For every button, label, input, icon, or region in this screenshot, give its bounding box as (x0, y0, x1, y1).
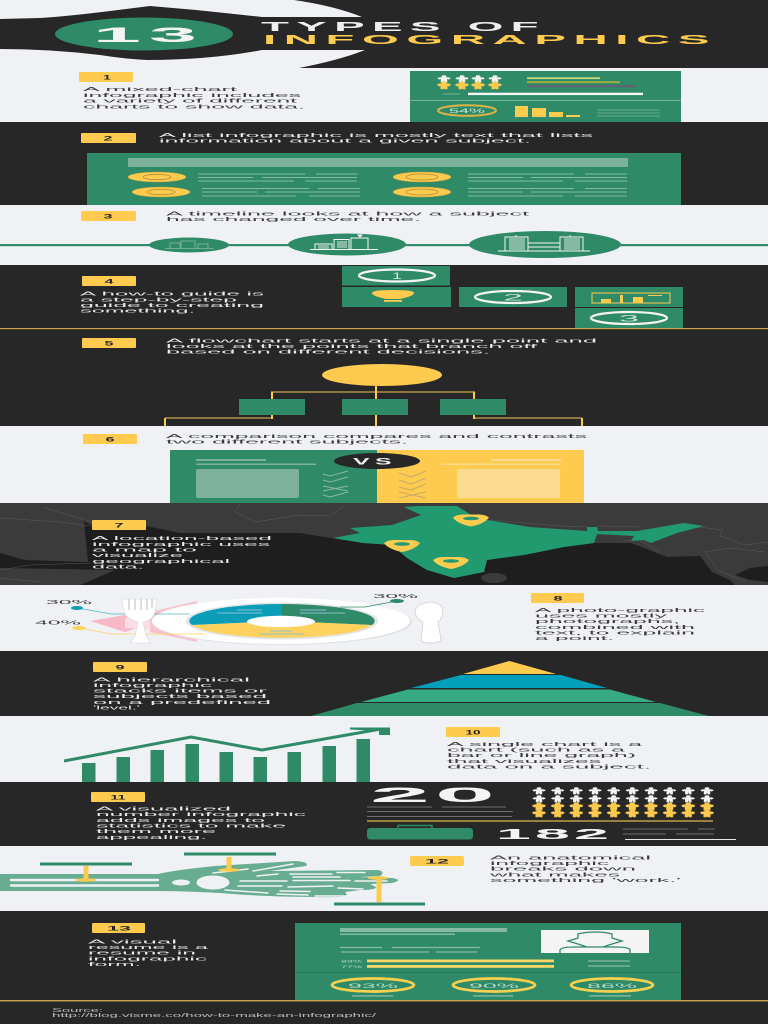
description 11: number infographic (96, 812, 307, 818)
description 8: uses mostly (535, 614, 668, 620)
ring 93 percent (332, 978, 414, 997)
timeline (0, 231, 768, 258)
description 9: subjects based (93, 694, 267, 700)
tag 12: 12 (425, 858, 451, 866)
plate (152, 598, 412, 645)
description 13: resume in (88, 950, 196, 956)
description 8: combined with (535, 625, 695, 631)
mixed chart illustration (410, 71, 681, 122)
description 6: two different subjects. (166, 440, 410, 446)
description 8: A photo-graphic (535, 608, 706, 614)
tag 3 (81, 211, 136, 221)
description 12: what makes (486, 872, 621, 878)
tag 5 (82, 338, 136, 348)
description 9 (93, 678, 271, 712)
panel 4: how-to (0, 265, 768, 329)
description 2: A list infographic is mostly text that lists (159, 133, 594, 139)
bar chart (64, 728, 390, 782)
description 3: has changed over time. (166, 217, 423, 223)
callout pin right (334, 876, 425, 906)
fork (122, 599, 157, 643)
description 1: a variety of different (83, 98, 299, 104)
tag 6: 6 (106, 436, 116, 444)
panel 7: location map (0, 503, 768, 585)
title (261, 20, 717, 47)
ring 86 percent (571, 978, 653, 997)
step 2 block: 2 (503, 292, 523, 304)
panel 11: visualized number (0, 782, 768, 846)
step 1 block (342, 266, 450, 286)
description 12: something 'work.' (490, 878, 681, 884)
description 7: A location-based (92, 536, 272, 542)
description 4 (80, 292, 265, 314)
skill bars (341, 958, 554, 969)
description 11: A visualized (96, 806, 231, 812)
tag 12 (410, 856, 464, 866)
trend arrow (64, 728, 390, 761)
panel 12: anatomical (0, 846, 768, 911)
description 3: A timeline looks at how a subject (166, 212, 531, 218)
tag 6 (83, 434, 137, 444)
big number 20 (367, 784, 513, 816)
borders (0, 504, 768, 582)
panel 2: list (0, 122, 768, 205)
tag 8 (531, 593, 584, 603)
description 11: them more (96, 829, 216, 835)
map pin north (453, 514, 489, 526)
tag 13 (92, 923, 145, 933)
description 7 (92, 536, 272, 570)
percentage labels: 30% (373, 594, 418, 600)
timeline icon medium (310, 235, 378, 250)
description 6 (166, 434, 588, 446)
description 13: A visual (88, 940, 177, 946)
panel 1: mixed chart (0, 68, 768, 122)
description 5 (166, 338, 597, 356)
description 13: form. (88, 962, 143, 968)
description 8: photographs, (535, 619, 682, 625)
panel 10: single chart (0, 716, 768, 782)
description 1: A mixed-chart (83, 87, 239, 93)
flowchart (165, 364, 582, 426)
description 10: data on a subject. (447, 764, 653, 770)
description 13 (88, 940, 211, 968)
description 7: data. (92, 564, 146, 570)
portrait (541, 930, 649, 953)
description 8 (535, 608, 706, 642)
tag 7 (92, 520, 146, 530)
description 12 (486, 856, 681, 884)
list illustration (87, 153, 681, 205)
briefcase icon (367, 826, 473, 840)
description 10 (447, 742, 653, 770)
ring 93 percent: 93% (348, 983, 399, 990)
panel 5: flowchart (0, 329, 768, 426)
Sri Lanka (481, 573, 507, 583)
chart block (575, 287, 683, 307)
ring 90 percent (453, 978, 535, 997)
donut chart (189, 604, 375, 638)
description 9: stacks items or (93, 688, 267, 694)
map pin west (384, 540, 420, 552)
tag 7: 7 (114, 522, 125, 530)
description 6: A comparison compares and contrasts (166, 434, 588, 440)
tag 9: 9 (116, 664, 126, 672)
description 7: visualize (92, 553, 183, 559)
people grid (532, 787, 714, 817)
skill bars: 89% (341, 958, 363, 964)
title: INFOGRAPHICS (263, 33, 717, 47)
tag 1 (79, 72, 133, 82)
description 4: A how-to guide is (80, 292, 265, 298)
description 12: An anatomical (490, 856, 651, 862)
sea (0, 521, 735, 585)
description 13: infographic (88, 956, 208, 962)
description 9: on a predefined (93, 700, 271, 706)
panel 9: hierarchical (0, 651, 768, 716)
mixed chart illustration: 54% (449, 109, 487, 115)
description 2: information about a given subject. (159, 138, 533, 144)
tag 2 (81, 133, 136, 143)
description 11 (96, 806, 307, 841)
tag 9 (93, 662, 147, 672)
description 11: appealing. (96, 835, 209, 841)
panel 6: comparison (0, 426, 768, 503)
description 7: infographic uses (92, 542, 271, 548)
description 1: infographic includes (83, 93, 302, 99)
description 13: resume is a (88, 945, 211, 951)
leader lines (77, 601, 397, 634)
description 7: a map to (92, 548, 197, 554)
ring 86 percent: 86% (587, 983, 638, 990)
percentage labels (35, 594, 418, 630)
step 3 block (575, 308, 683, 328)
description 5: based on different decisions. (166, 350, 492, 356)
title: TYPES OF (261, 20, 546, 34)
step 2 block (459, 287, 567, 307)
timeline icon large (498, 235, 590, 251)
tag 4 (82, 276, 136, 286)
description 10: bar or line graph) (447, 753, 636, 759)
VS badge: VS (353, 456, 397, 466)
tag 10 (446, 727, 500, 737)
description 9: 'level.' (93, 706, 140, 712)
skill bars: 77% (341, 964, 363, 969)
description 7: geographical (92, 559, 230, 565)
callout pin left (40, 862, 132, 882)
tag 8: 8 (554, 596, 564, 602)
pink napkin (90, 601, 197, 642)
panel 13: visual resume (0, 911, 768, 1001)
bulb block (342, 287, 451, 307)
description 5: A flowchart starts at a single point and (166, 338, 597, 344)
source footer: Source: (52, 1008, 103, 1014)
tag 13: 13 (107, 926, 133, 932)
tag 1: 1 (103, 74, 112, 82)
description 4: guide to creating (80, 303, 264, 309)
pyramid (311, 661, 709, 716)
description 12: breaks down (490, 866, 636, 872)
resume illustration (295, 923, 681, 1000)
tag 11 (91, 792, 145, 802)
map pin south (433, 557, 469, 569)
description 11: statistics to make (96, 824, 286, 830)
description 1 (83, 87, 307, 110)
description 1: charts to show data. (83, 104, 307, 110)
header banner (0, 0, 717, 68)
description 3 (166, 212, 531, 223)
description 8: a point. (535, 636, 616, 642)
tag 3: 3 (104, 214, 114, 220)
ring 90 percent: 90% (469, 983, 520, 990)
big number 182 (496, 826, 736, 843)
description 8: text, to explain (535, 630, 695, 636)
tag 11: 11 (110, 794, 126, 802)
tag 2: 2 (104, 136, 114, 142)
description 10: that visualizes (447, 759, 602, 765)
percentage labels: 30% (46, 600, 92, 606)
percentage labels: 40% (35, 620, 81, 626)
timeline icon small (165, 241, 214, 248)
description 9: infographic (93, 683, 213, 689)
VS badge (334, 453, 420, 469)
source footer: http://blog.visme.co/how-to-make-an-infographic/ (52, 1013, 378, 1019)
description 12: infographic (490, 861, 610, 867)
number 13 badge (55, 18, 233, 50)
India (333, 506, 704, 578)
hand skeleton (0, 861, 398, 897)
tag 5: 5 (104, 340, 115, 348)
source footer (52, 1008, 378, 1019)
description 11: adds images to (96, 818, 265, 824)
callout pin top (184, 852, 276, 872)
step 3 block: 3 (619, 314, 639, 324)
comparison green side (170, 450, 377, 503)
number 13 badge: 13 (93, 24, 205, 47)
description 10: A single chart is a (447, 742, 646, 748)
big number 182: 182 (496, 826, 613, 843)
comparison yellow side (377, 450, 584, 503)
description 5: looks at the points that branch off (166, 344, 539, 350)
description 10: chart (such as a (447, 748, 629, 754)
big number 20: 20 (370, 784, 500, 807)
panel 8: photo graphic (0, 585, 768, 651)
step 1 block: 1 (392, 271, 402, 282)
tag 10: 10 (466, 730, 481, 736)
description 2 (159, 133, 594, 144)
description 4: something. (80, 308, 197, 314)
panel 3: timeline (0, 205, 768, 265)
description 9: A hierarchical (93, 678, 250, 684)
description 4: a step-by-step (80, 298, 237, 304)
tag 4: 4 (104, 278, 115, 286)
spoon (415, 602, 443, 643)
